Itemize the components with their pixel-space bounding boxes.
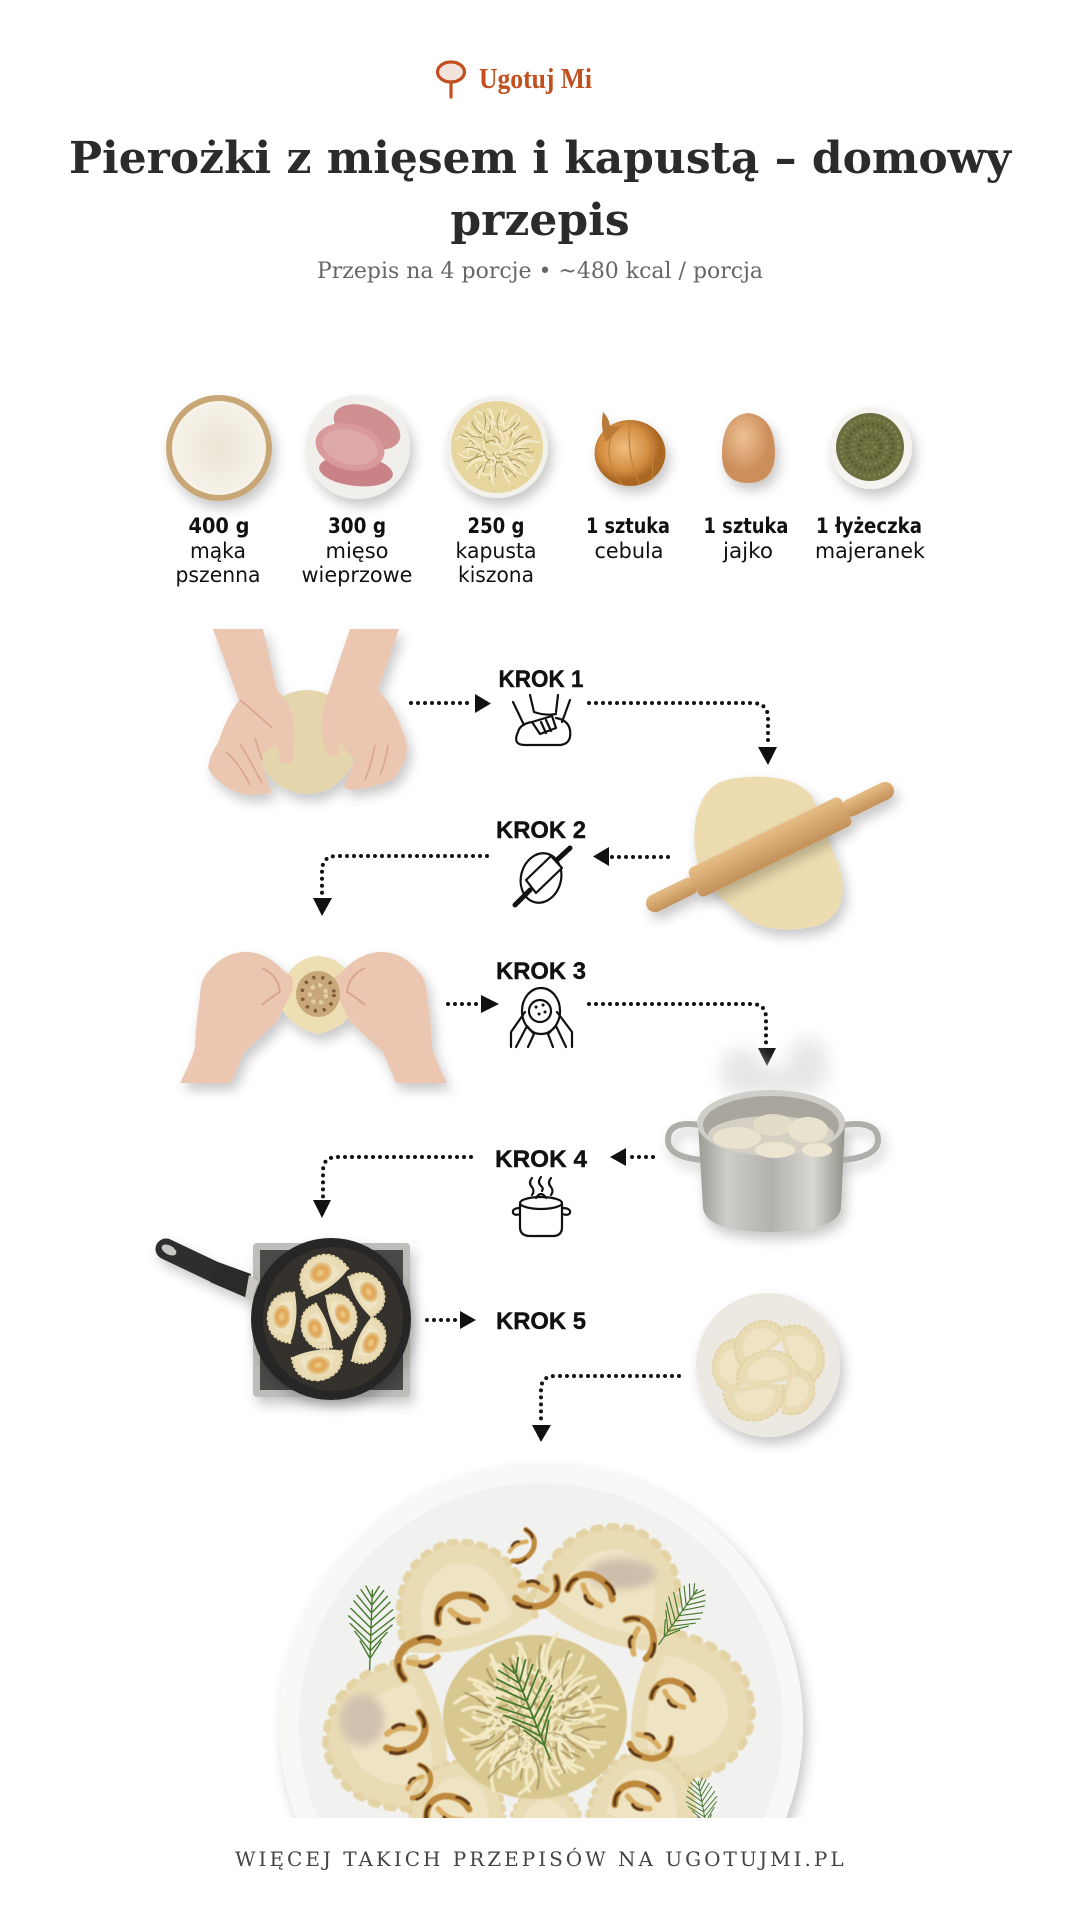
photo: finished pierogi plate [277, 1463, 813, 1818]
ingredient: egg: jajko [722, 539, 773, 563]
logo [438, 62, 592, 97]
photo: pot of boiling dumplings [668, 1037, 878, 1232]
icon: pot with steam [513, 1177, 570, 1236]
ingredient: onion: 1 sztuka [586, 514, 670, 538]
photo: rolled dough with rolling pin [640, 773, 900, 929]
ingredient: onion: cebula [594, 539, 664, 563]
icon: rolling pin [515, 848, 570, 907]
step 5 label: KROK 5 [496, 1308, 586, 1335]
icon: filling dumpling [511, 988, 572, 1047]
title: Pierożki z mięsem i kapustą – domowy [69, 133, 1012, 184]
ingredient: pork: mięso [326, 539, 388, 563]
fried onions [379, 1529, 697, 1823]
ingredient: egg: 1 sztuka [704, 514, 788, 538]
arrow: pot to step 4 [610, 1148, 653, 1166]
arrow: step 4 to pan [313, 1157, 471, 1218]
subtitle: Przepis na 4 porcje • ~480 kcal / porcja [317, 259, 763, 284]
step 1 label: KROK 1 [498, 666, 584, 693]
ingredient: sauerkraut: 250 g [468, 514, 524, 538]
arrow: to step 1 [411, 694, 491, 713]
steam [720, 1037, 828, 1096]
ingredient: flour: pszenna [176, 563, 260, 587]
photo: hands filling dumpling [180, 952, 447, 1083]
photo: plate of dumplings [696, 1293, 840, 1437]
ingredient: sauerkraut: kiszona [458, 563, 534, 587]
step 4 label: KROK 4 [495, 1146, 588, 1173]
arrow: rolled dough to step 2 [593, 847, 668, 866]
photo: hands kneading dough [208, 629, 407, 795]
ingredient: pork [302, 395, 412, 587]
ingredient: pork: 300 g [328, 514, 386, 538]
title [69, 133, 1012, 246]
ingredient: marjoram: 1 łyżeczka [816, 514, 922, 538]
logo wordmark: Ugotuj Mi [479, 63, 592, 95]
arrow: step 1 to rolled dough [589, 703, 777, 765]
dumplings [322, 1522, 756, 1818]
arrow: step 2 to filling [313, 856, 487, 916]
sauerkraut [442, 1632, 628, 1800]
ingredient: onion [586, 412, 670, 563]
arrow: to step 5 [427, 1311, 476, 1329]
ingredient: pork: wieprzowe [302, 563, 412, 587]
ingredient: flour [166, 395, 272, 587]
step 3 label: KROK 3 [496, 958, 586, 985]
footer: WIĘCEJ TAKICH PRZEPISÓW NA UGOTUJMI.PL [235, 1846, 846, 1871]
ingredient: flour: 400 g [188, 514, 250, 538]
ingredient: flour: mąka [190, 539, 246, 563]
ingredient: sauerkraut [443, 393, 552, 587]
ingredient: marjoram: majeranek [815, 539, 926, 563]
arrow: to step 3 [448, 995, 499, 1013]
arrow: step 3 to pot [589, 1004, 776, 1066]
ingredient: egg [704, 413, 788, 563]
arrow: plate to final dish [532, 1376, 679, 1442]
photo: frying pan with dumplings [160, 1238, 411, 1400]
icon: spoon [438, 62, 464, 97]
title: przepis [450, 195, 630, 246]
ingredient: marjoram [815, 407, 926, 563]
icon: kneading [513, 695, 570, 745]
ingredients row [166, 393, 926, 587]
ingredient: sauerkraut: kapusta [456, 539, 536, 563]
dill [348, 1583, 718, 1818]
step 2 label: KROK 2 [496, 817, 586, 844]
